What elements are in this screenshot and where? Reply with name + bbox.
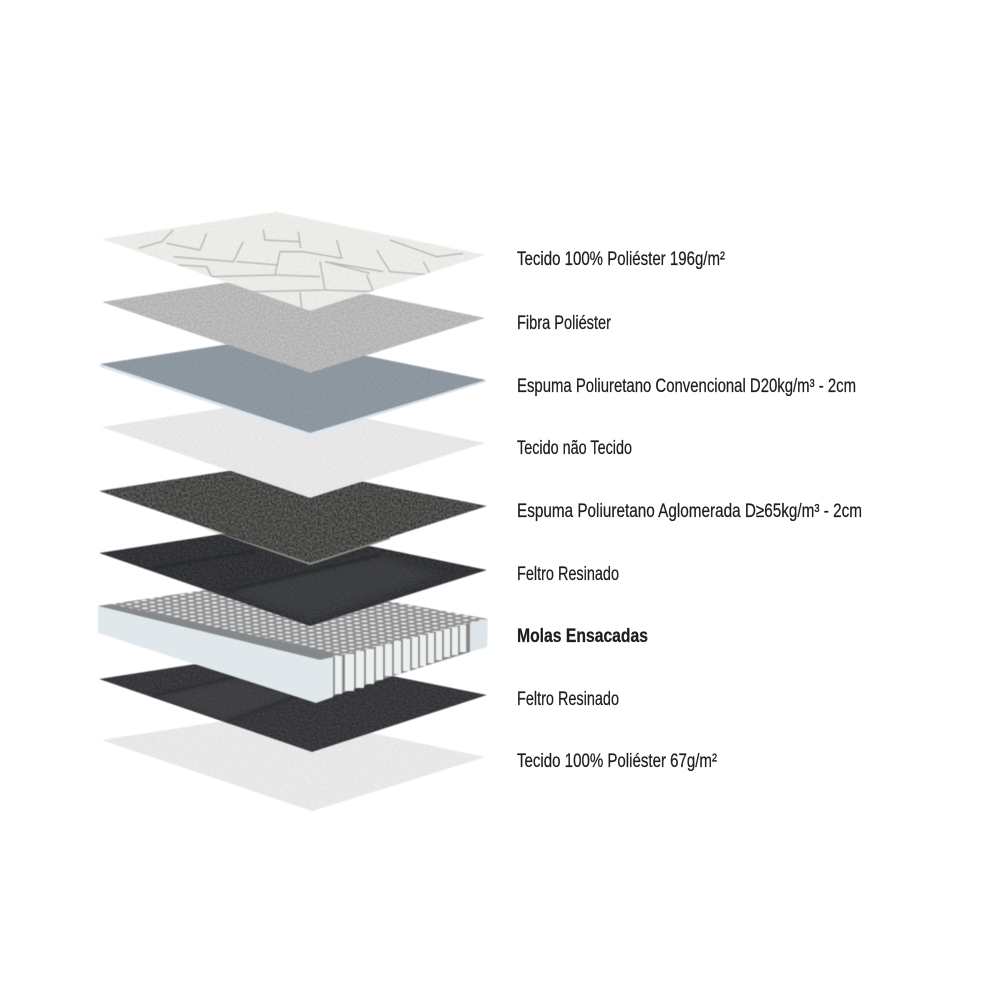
layer 1: quilted polyester fabric [102,212,485,311]
spring columns [333,623,470,696]
foam edge [200,527,390,565]
label: bottom fabric: Tecido 100% Poliéster 67g/m² [517,751,717,772]
mattress layers infographic [98,212,862,811]
layer 5: bonded polyurethane foam [99,464,487,565]
layer 9: bottom polyester fabric [102,713,485,811]
label: pocket springs: Molas Ensacadas [517,626,648,647]
left foam side [98,606,333,703]
layer 6: upper resin felt [99,526,487,626]
grey border strip [98,604,333,660]
layer 3: conventional polyurethane foam [100,337,486,436]
foam top [99,464,487,563]
label: polyester fibre: Fibra Poliéster [517,313,612,334]
label: top fabric: Tecido 100% Poliéster 196g/m² [517,249,725,270]
label: upper felt: Feltro Resinado [517,564,619,585]
layer 4: non-woven fabric [102,400,485,498]
label: non-woven fabric: Tecido não Tecido [517,438,632,459]
layer 2: polyester fibre [102,275,485,373]
label: bonded foam: Espuma Poliuretano Aglomerada D≥65kg/m³ - 2cm [517,501,862,522]
foam top [100,337,486,433]
label: lower felt: Feltro Resinado [517,689,619,710]
layer 7: pocket springs block [98,580,488,703]
foam edge [100,364,486,436]
label: conventional foam: Espuma Poliuretano Convencional D20kg/m³ - 2cm [517,376,856,397]
layer 8: lower resin felt [99,664,487,753]
right foam end [470,619,488,652]
spring block top face [98,580,488,660]
